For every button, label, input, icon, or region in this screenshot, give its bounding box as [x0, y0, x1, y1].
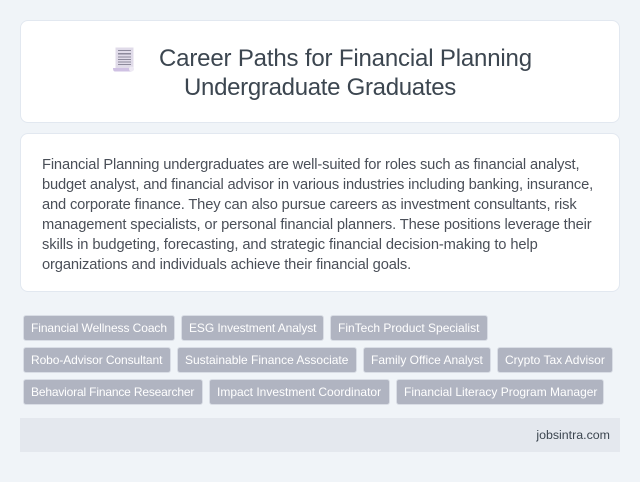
panel: title card [20, 20, 620, 123]
description text: Financial Planning undergraduates are well-suited for roles such as financial analyst, [42, 157, 579, 173]
description text: organizations and individuals achieve their financial goals. [42, 257, 411, 273]
description text: skills in budgeting, forecasting, and strategic financial decision-making to help [42, 237, 538, 253]
footer source text: jobsintra.com [536, 428, 610, 442]
description text: budget analyst, and financial advisor in various industries including banking, insurance, [42, 177, 593, 193]
career tags: Impact Investment Coordinator [217, 385, 381, 399]
career tags: ESG Investment Analyst [189, 321, 316, 335]
icon: document scroll [113, 48, 134, 72]
career tags: Behavioral Finance Researcher [31, 385, 194, 399]
career tags: Robo-Advisor Consultant [31, 353, 162, 367]
career tags: Financial Wellness Coach [31, 321, 167, 335]
career tags: Sustainable Finance Associate [185, 353, 348, 367]
panel: description card [20, 133, 620, 292]
description text [42, 157, 593, 273]
description text: and corporate finance. They can also pursue careers as investment consultants, risk [42, 197, 577, 213]
career tags: FinTech Product Specialist [338, 321, 479, 335]
career tags: Financial Literacy Program Manager [404, 385, 597, 399]
career tags: Family Office Analyst [371, 353, 483, 367]
career tags [23, 315, 613, 405]
title: Undergraduate Graduates [184, 74, 456, 101]
title [159, 45, 532, 101]
footer bar [20, 418, 620, 452]
career tags: Crypto Tax Advisor [505, 353, 605, 367]
description text: management specialists, or personal financial planners. These positions leverage their [42, 217, 592, 233]
title: Career Paths for Financial Planning [159, 45, 532, 72]
